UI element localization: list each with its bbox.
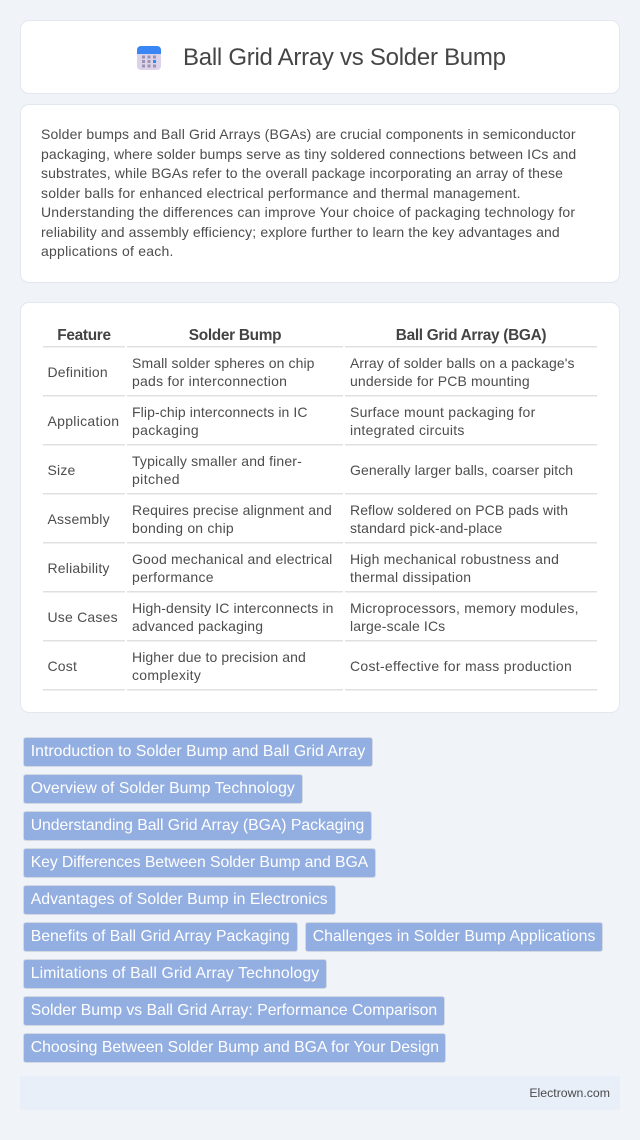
tag: introduction: Introduction to Solder Bump and Ball Grid Array (31, 743, 365, 760)
tag: understanding BGA (23, 811, 372, 841)
row: Reliability: High mechanical robustness and (350, 551, 559, 567)
row: Assembly: Requires precise alignment and (132, 502, 332, 518)
row: Use Cases: advanced packaging (132, 618, 263, 634)
row: Definition: underside for PCB mounting (350, 373, 530, 389)
table rules (43, 346, 597, 690)
tag: advantages: Advantages of Solder Bump in Electronics (31, 891, 328, 908)
intro text: packaging, where solder bumps serve as tiny soldered connections between ICs and (41, 146, 576, 162)
intro text (41, 126, 576, 259)
panel: comparison table (20, 302, 620, 713)
row: Reliability (48, 551, 559, 585)
tag: performance comparison (23, 996, 445, 1026)
row: Application (48, 404, 536, 438)
row: Application: packaging (132, 422, 199, 438)
row: Use Cases (48, 600, 579, 634)
row: Definition: pads for interconnection (132, 373, 287, 389)
tag: introduction (23, 737, 373, 767)
row: Definition: Array of solder balls on a package's (350, 355, 575, 371)
row: Assembly: Assembly (48, 511, 110, 527)
row: Assembly: bonding on chip (132, 520, 234, 536)
row: Use Cases: large-scale ICs (350, 618, 445, 634)
icon: calendar grid (137, 46, 161, 70)
tag: benefits (23, 922, 298, 952)
intro text: applications of each. (41, 243, 174, 259)
intro text: substrates, while BGAs refer to the overall package incorporating an array of these (41, 165, 563, 181)
row: Reliability: performance (132, 569, 214, 585)
row: Definition: Small solder spheres on chip (132, 355, 315, 371)
tag: challenges: Challenges in Solder Bump Applications (313, 928, 595, 945)
row: Size: Typically smaller and finer- (132, 453, 302, 469)
header card (20, 20, 620, 94)
row: Cost: Cost-effective for mass production (350, 658, 572, 674)
tag: overview (23, 774, 303, 804)
row: Use Cases: Use Cases (48, 609, 118, 625)
row: Size: Generally larger balls, coarser pitch (350, 462, 573, 478)
intro text: solder balls for enhanced electrical performance and thermal management. (41, 184, 521, 200)
tag: key differences (23, 848, 376, 878)
row: Size (48, 453, 573, 487)
title: Ball Grid Array vs Solder Bump (183, 44, 506, 71)
row: Reliability: Good mechanical and electrical (132, 551, 332, 567)
tag: limitations: Limitations of Ball Grid Array Technology (31, 965, 319, 982)
tag: challenges (305, 922, 603, 952)
row: Reliability: Reliability (48, 560, 110, 576)
row: Definition (48, 355, 575, 389)
tag: key differences: Key Differences Between Solder Bump and BGA (31, 854, 368, 871)
tag: choosing: Choosing Between Solder Bump and BGA for Your Design (31, 1039, 439, 1056)
row: Definition: Definition (48, 364, 108, 380)
row: Size: pitched (132, 471, 180, 487)
row: Cost: complexity (132, 667, 201, 683)
intro text: Solder bumps and Ball Grid Arrays (BGAs) are crucial components in semiconductor (41, 126, 576, 142)
table header: Solder Bump: Solder Bump (189, 327, 281, 344)
tag: understanding BGA: Understanding Ball Grid Array (BGA) Packaging (31, 817, 364, 834)
row: Cost: Cost (48, 658, 77, 674)
row: Application: Application (48, 413, 119, 429)
panel: introduction (20, 104, 620, 283)
row: Cost (48, 649, 572, 683)
footer (20, 1076, 620, 1110)
tag: benefits: Benefits of Ball Grid Array Packaging (31, 928, 290, 945)
row: Application: Surface mount packaging for (350, 404, 535, 420)
row: Assembly: standard pick-and-place (350, 520, 502, 536)
row: Use Cases: High-density IC interconnects in (132, 600, 334, 616)
tag: choosing (23, 1033, 446, 1063)
row: Assembly (48, 502, 568, 536)
tag: advantages (23, 885, 336, 915)
row: Cost: Higher due to precision and (132, 649, 306, 665)
tag: overview: Overview of Solder Bump Technology (31, 780, 295, 797)
table header: Ball Grid Array: Ball Grid Array (BGA) (396, 327, 546, 344)
table header: Feature: Feature (57, 327, 111, 344)
row: Assembly: Reflow soldered on PCB pads with (350, 502, 568, 518)
intro text: Understanding the differences can improve Your choice of packaging technology for (41, 204, 575, 220)
footer credit: Electrown.com (529, 1086, 610, 1100)
tag: limitations (23, 959, 327, 989)
row: Application: Flip-chip interconnects in IC (132, 404, 308, 420)
intro text: reliability and assembly efficiency; explore further to learn the key advantages and (41, 224, 560, 240)
row: Reliability: thermal dissipation (350, 569, 471, 585)
row: Use Cases: Microprocessors, memory modules, (350, 600, 579, 616)
row: Application: integrated circuits (350, 422, 465, 438)
tag: performance comparison: Solder Bump vs Ball Grid Array: Performance Comparison (31, 1002, 437, 1019)
row: Size: Size (48, 462, 76, 478)
